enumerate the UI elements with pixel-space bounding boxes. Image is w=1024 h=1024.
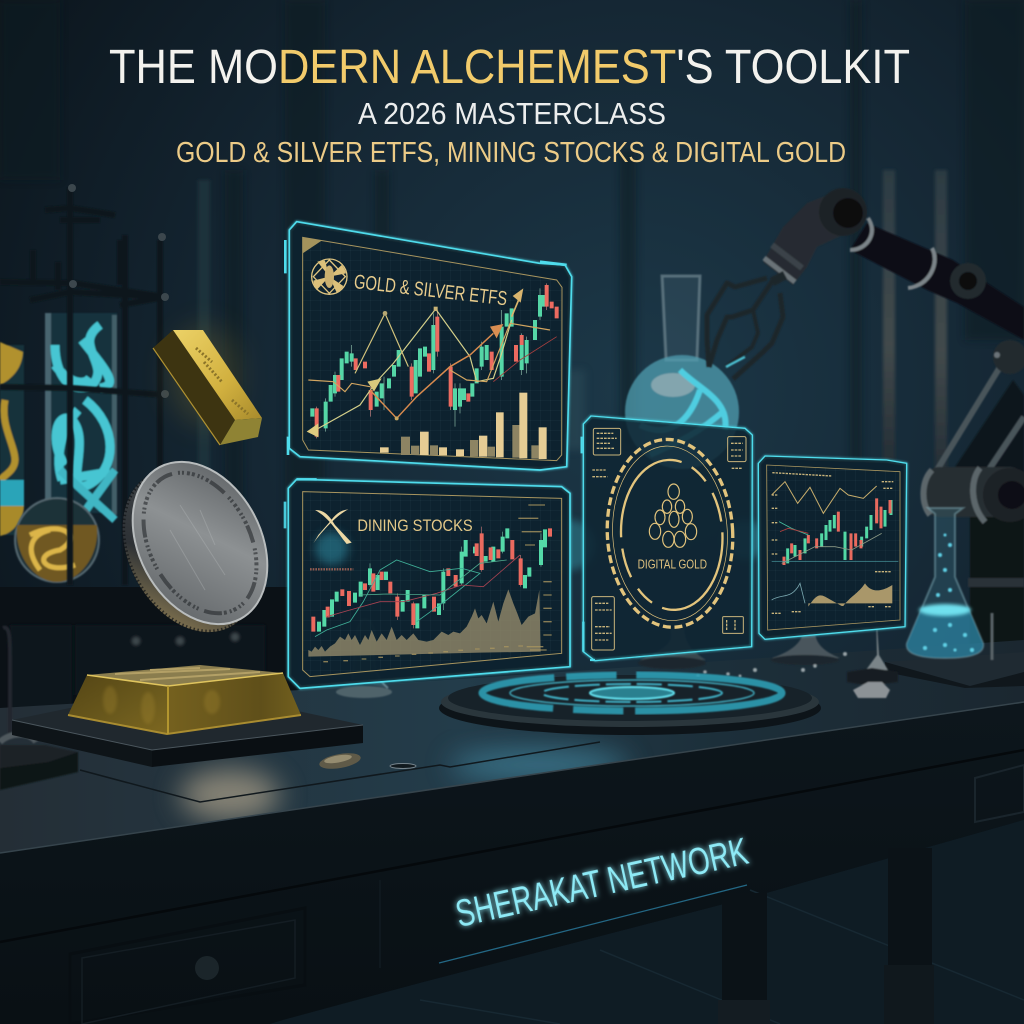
left lab shelf with glass tubes and rack — [0, 184, 300, 720]
table legs — [718, 848, 934, 1024]
metal rack — [0, 188, 165, 585]
panel: digital gold — [582, 416, 752, 661]
moving averages — [779, 522, 882, 563]
right flask base plate — [885, 652, 1024, 688]
ETF emblem — [312, 259, 347, 294]
line chart — [772, 482, 877, 513]
crossed pickaxe icon — [313, 509, 352, 565]
candlestick chart — [312, 283, 557, 438]
gripper claws — [707, 275, 785, 379]
cabinet door details — [10, 625, 265, 715]
subtitle: A 2026 MASTERCLASS — [358, 96, 666, 131]
trend lines — [308, 309, 557, 428]
gold molecule icon — [649, 484, 697, 547]
gold swirl tube — [0, 342, 24, 536]
glass stands — [336, 610, 992, 698]
table edge lines and drawers — [0, 750, 1024, 1024]
table top surface — [0, 640, 1024, 853]
cyan swirl tube — [45, 313, 117, 525]
panel frame — [758, 456, 907, 639]
panel frame — [289, 222, 572, 470]
axis tick labels — [310, 505, 552, 662]
table front face — [0, 702, 1024, 1024]
brand engraved on table: SHERAKAT NETWORK — [452, 831, 752, 936]
holographic disc — [439, 675, 821, 735]
moving average lines — [315, 555, 520, 637]
robotic arm — [707, 188, 1024, 645]
trend arrowheads and markers — [307, 288, 523, 437]
panel frame — [583, 416, 752, 661]
silver ingot plate — [12, 708, 363, 767]
candles — [784, 498, 891, 565]
upper arm — [850, 223, 1024, 340]
floating silver coin — [96, 438, 294, 656]
round-bottom flask gold — [15, 498, 99, 582]
panel frame — [288, 479, 570, 688]
candlestick chart — [313, 527, 550, 632]
left stand base — [0, 628, 78, 790]
wrist — [763, 193, 847, 285]
volume area chart — [308, 589, 541, 657]
heading: GOLD & SILVER ETFS — [353, 271, 508, 310]
cyan underglow strip — [439, 885, 747, 963]
title block — [109, 41, 910, 169]
title: THE MODERN ALCHEMEST'S TOOLKIT — [109, 41, 910, 94]
floating gold bar — [153, 325, 262, 445]
volume bars — [380, 393, 547, 459]
heading: DINING STOCKS — [357, 516, 473, 535]
lower arm and base — [923, 340, 1024, 645]
gold ingot on plate — [68, 665, 301, 734]
back cabinet — [0, 587, 300, 720]
table slot — [390, 764, 416, 768]
panel: market chart — [758, 456, 907, 639]
joint 2 — [950, 263, 986, 299]
info boxes — [592, 428, 746, 650]
table light reflections — [80, 742, 630, 821]
glowing rings — [482, 675, 782, 711]
panel: mining stocks — [285, 479, 570, 688]
chart caption lines — [772, 473, 893, 613]
center glass flask — [625, 276, 739, 469]
panel: gold and silver ETFs — [285, 222, 572, 470]
joint 1 — [819, 188, 867, 236]
rack joints — [68, 184, 169, 398]
small gold nugget on table — [318, 750, 362, 772]
blurred background glassware behind panels — [350, 370, 765, 595]
area chart — [808, 583, 892, 607]
right erlenmeyer flask — [907, 508, 983, 658]
topics line: GOLD & SILVER ETFS, MINING STOCKS & DIGITAL GOLD — [176, 137, 846, 169]
floor — [270, 820, 1024, 1024]
heading: DIGITAL GOLD — [638, 556, 707, 571]
digital gold rings — [602, 436, 737, 630]
elbow rings — [850, 218, 935, 288]
